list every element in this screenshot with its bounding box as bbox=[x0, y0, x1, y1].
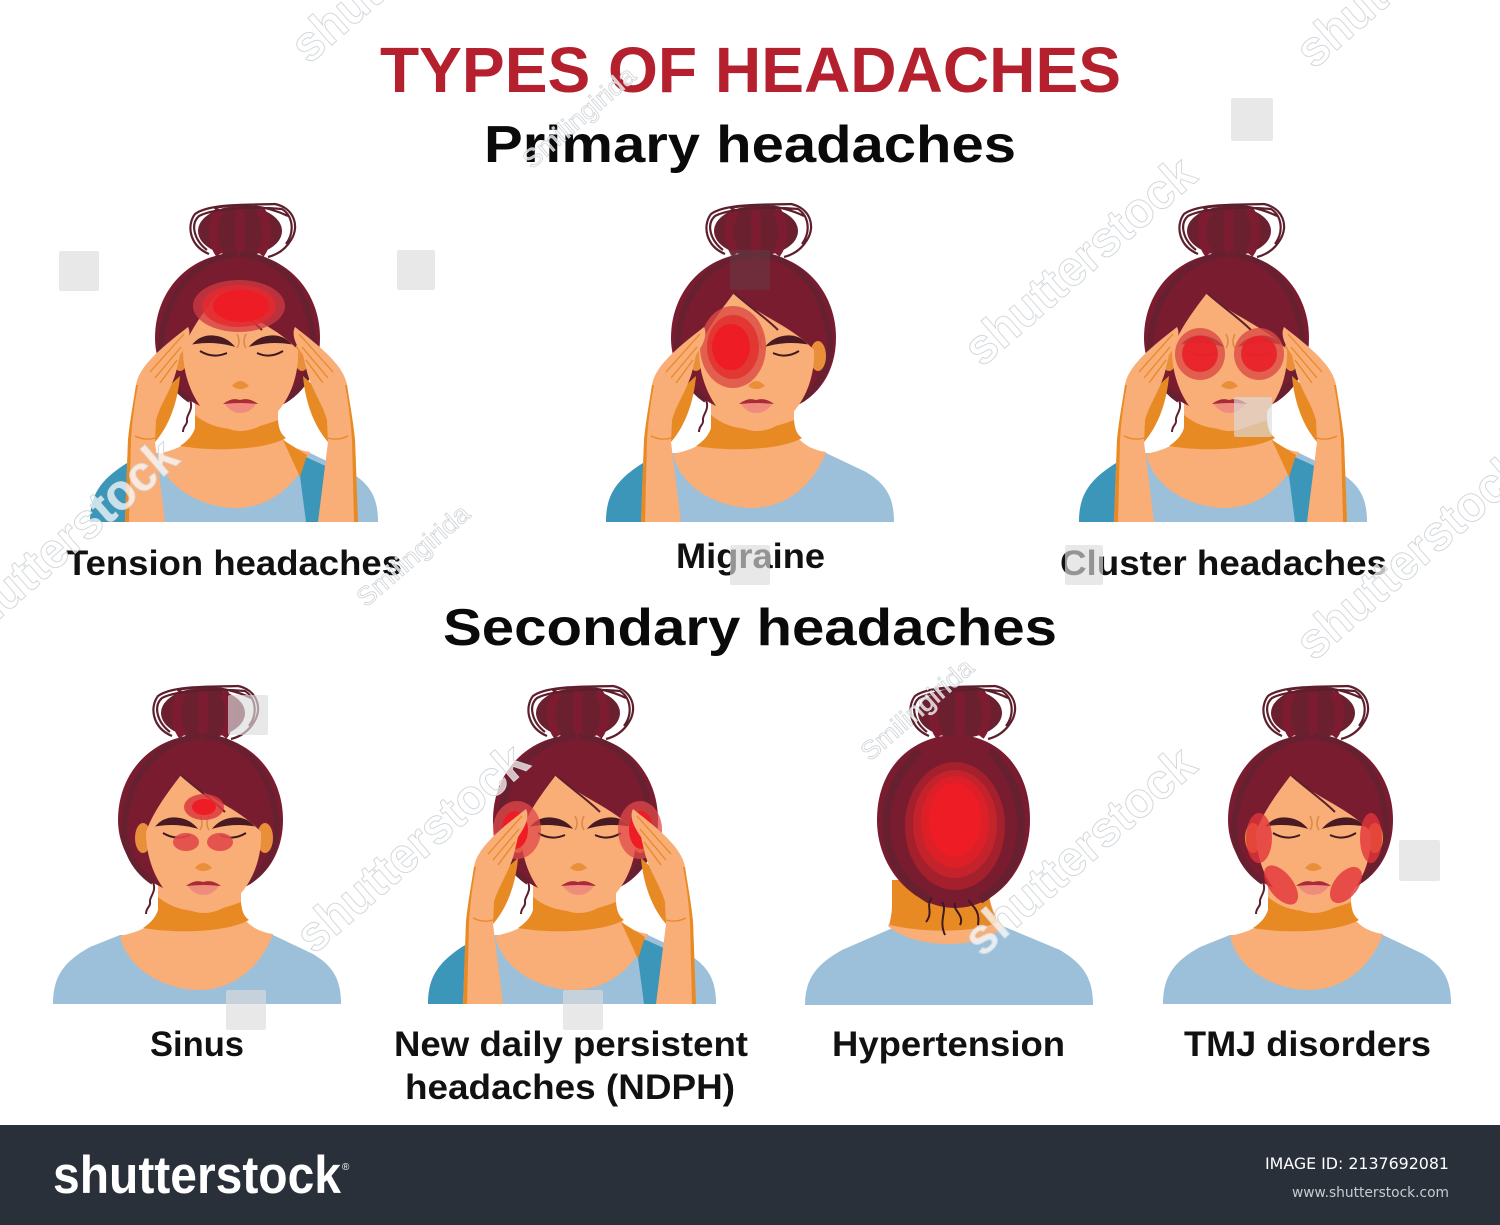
pain area: sinuses bbox=[173, 794, 233, 851]
label: NDPH bbox=[394, 1025, 748, 1107]
title: TYPES OF HEADACHES bbox=[380, 34, 1121, 106]
figure: TMJ disorders bbox=[1163, 686, 1451, 1004]
pain area: both eyes bbox=[1175, 328, 1284, 380]
label: sinus: Sinus bbox=[150, 1025, 244, 1064]
label: hypertension: Hypertension bbox=[832, 1025, 1065, 1064]
label: tension headaches: Tension headaches bbox=[66, 544, 402, 583]
watermark text: shutterstock bbox=[952, 145, 1207, 376]
pain area: back of head bbox=[905, 762, 1005, 890]
figure: hypertension (back of head) bbox=[805, 686, 1093, 1005]
label: NDPH: New daily persistent bbox=[394, 1025, 748, 1064]
watermark tiles bbox=[59, 98, 1440, 1030]
label: TMJ disorders: TMJ disorders bbox=[1184, 1025, 1431, 1064]
footer bar bbox=[0, 1125, 1500, 1225]
footer registered mark: ® bbox=[342, 1162, 350, 1173]
label: cluster headaches: Cluster headaches bbox=[1060, 544, 1387, 583]
footer url: www.shutterstock.com bbox=[1292, 1185, 1449, 1201]
figure: cluster headaches bbox=[1079, 204, 1367, 522]
watermark text: Smilingirida bbox=[350, 498, 476, 613]
heading: secondary headaches: Secondary headaches bbox=[443, 599, 1057, 657]
label: NDPH: headaches (NDPH) bbox=[405, 1068, 735, 1107]
watermark text: Smilingirida bbox=[516, 60, 642, 175]
heading: primary headaches: Primary headaches bbox=[484, 116, 1016, 174]
watermark text bbox=[0, 0, 1500, 966]
footer logo: shutterstock bbox=[53, 1146, 341, 1205]
pain area: temples bbox=[493, 801, 662, 859]
figure: tension headaches bbox=[90, 204, 378, 522]
pain area: jaw joints bbox=[1246, 813, 1382, 911]
watermark text: Smilingirida bbox=[854, 652, 980, 767]
watermark text: shutterstock bbox=[952, 735, 1207, 966]
watermark text: shutterstock bbox=[284, 732, 539, 963]
figure: sinus bbox=[53, 686, 341, 1004]
footer image id: IMAGE ID: 2137692081 bbox=[1265, 1154, 1449, 1173]
label: migraine: Migraine bbox=[676, 537, 825, 576]
pain area: forehead bbox=[193, 280, 285, 332]
figure: migraine bbox=[606, 204, 894, 522]
pain area: left side of head bbox=[700, 306, 766, 388]
figure: new daily persistent headaches bbox=[428, 686, 716, 1004]
